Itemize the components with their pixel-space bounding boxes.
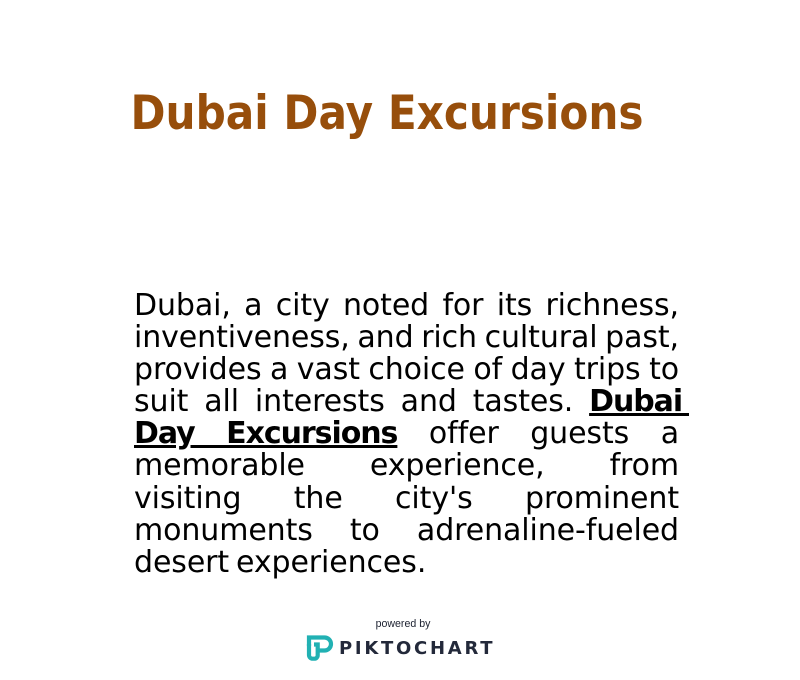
logo wordmark: PIKTOCHART [339, 638, 493, 659]
text block: intro paragraph: visiting the city's prominent [134, 481, 679, 516]
text block: intro paragraph [134, 288, 689, 580]
text block: intro paragraph: Day Excursions offer guests a [134, 416, 679, 451]
text block: intro paragraph: provides a vast choice of day trips to [134, 352, 679, 387]
powered by label: powered by [376, 618, 430, 630]
text block: intro paragraph: inventiveness, and rich cultural past, [134, 320, 679, 355]
title: Dubai Day Excursions [130, 86, 644, 141]
text block: intro paragraph: memorable experience, from [134, 448, 679, 483]
text block: intro paragraph: desert experiences. [134, 545, 426, 580]
text block: intro paragraph: monuments to adrenaline-fueled [134, 513, 679, 548]
icon: Piktochart P mark [309, 638, 331, 659]
text block: intro paragraph: Dubai, a city noted for its richness, [134, 288, 679, 323]
text block: intro paragraph: suit all interests and tastes. Dubai [134, 384, 682, 419]
Piktochart logo [306, 635, 493, 661]
